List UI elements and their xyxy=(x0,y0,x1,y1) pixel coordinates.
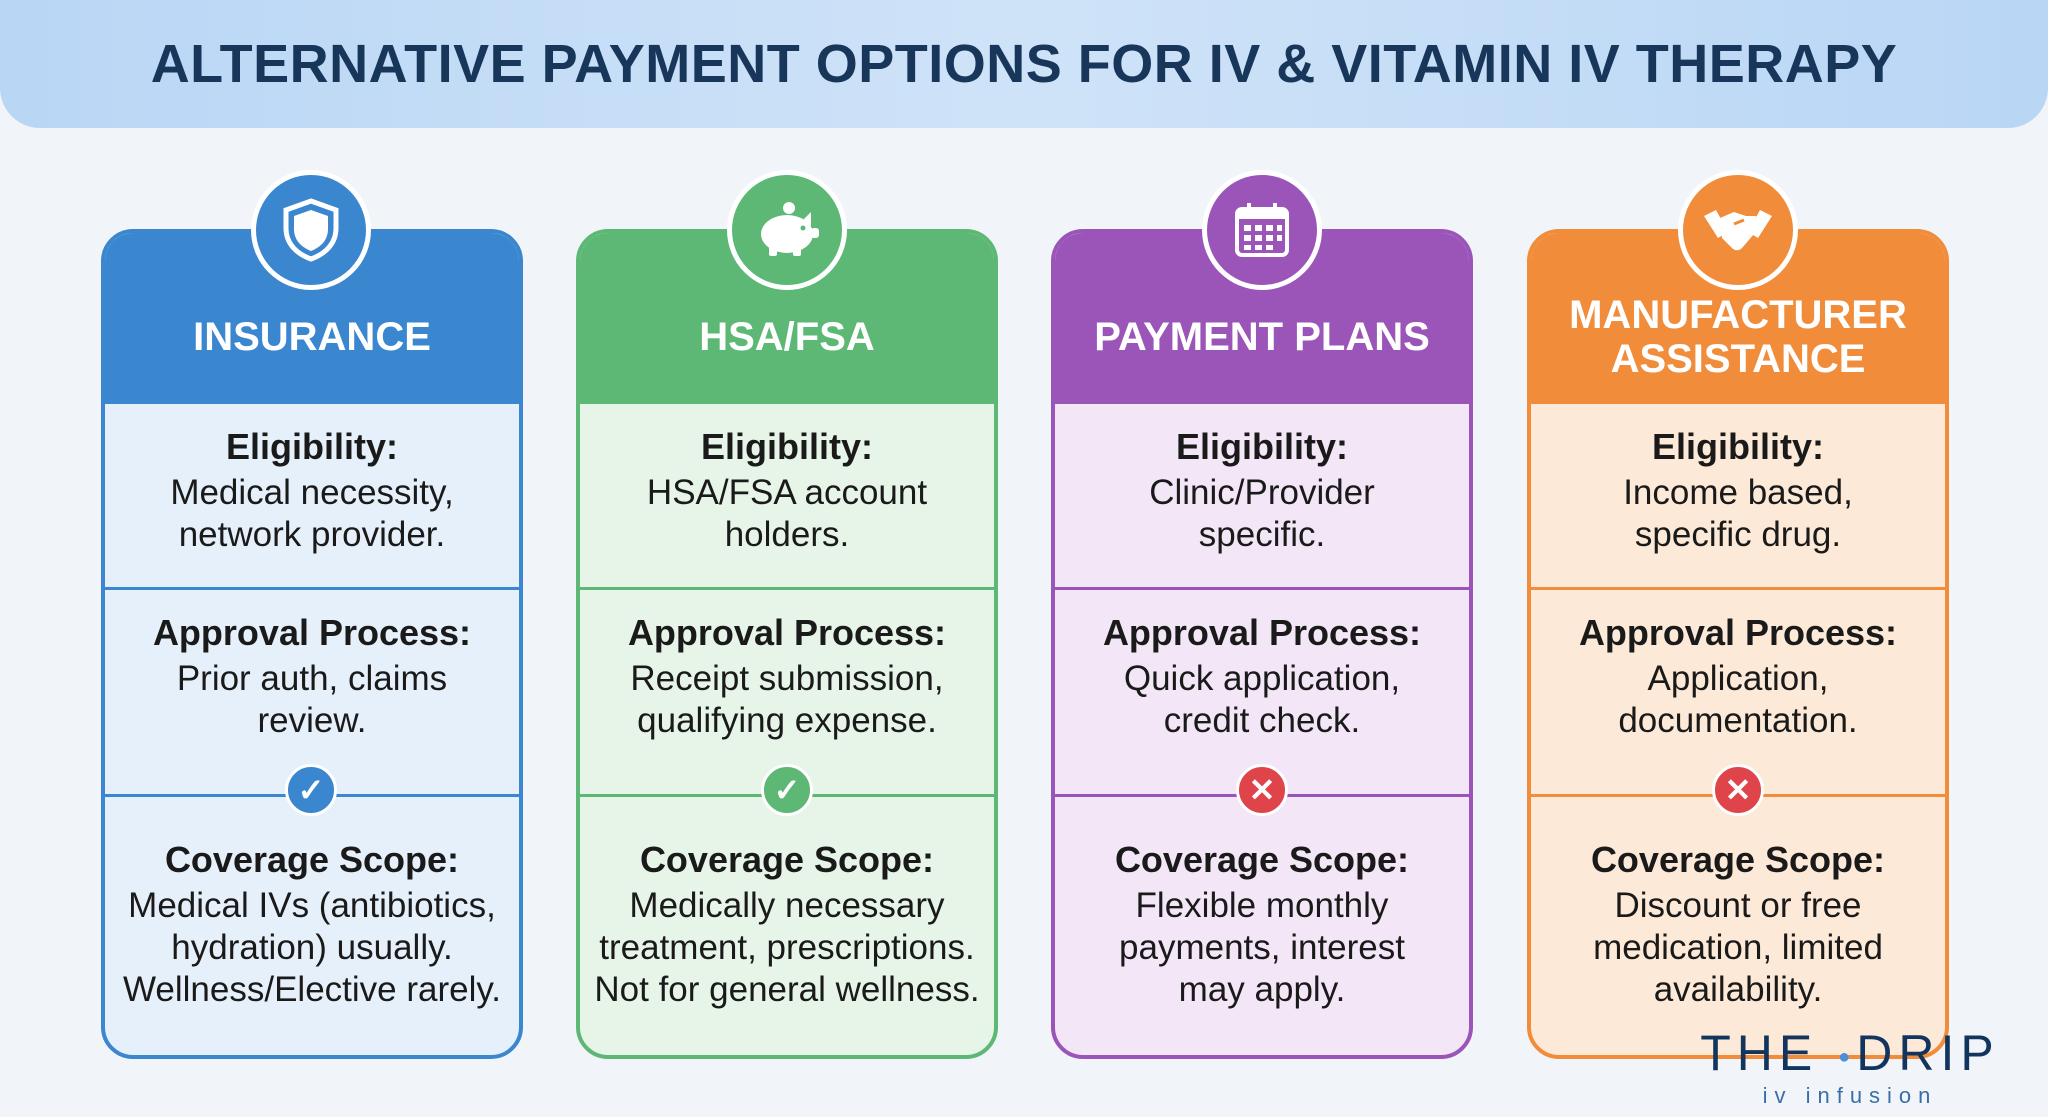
row: coverage: Coverage Scope: xyxy=(1591,839,1885,880)
icon: check insurance xyxy=(285,764,337,816)
row: approval: Quick application, xyxy=(1124,659,1400,698)
row: eligibility: Eligibility: xyxy=(226,426,398,466)
logo xyxy=(1700,1025,2000,1108)
row: coverage xyxy=(580,794,994,1063)
row: eligibility: Eligibility: xyxy=(1652,426,1824,466)
row: approval xyxy=(580,587,994,794)
row: eligibility: specific. xyxy=(1199,514,1325,554)
logo: THE ●DRIP xyxy=(1700,1025,2000,1081)
panel: manufacturer assistance xyxy=(1527,229,1949,1059)
icon: x manufacturer: ✕ xyxy=(1725,772,1751,808)
row: approval: credit check. xyxy=(1164,701,1360,740)
row: approval: Approval Process: xyxy=(628,612,946,653)
row: approval: Application, xyxy=(1648,659,1828,698)
title xyxy=(0,0,2048,128)
row: coverage: treatment, prescriptions. xyxy=(599,928,975,967)
icon: handshake xyxy=(1678,170,1798,290)
row: coverage: Medically necessary xyxy=(629,886,945,925)
row: coverage: hydration) usually. xyxy=(171,928,453,967)
header: payment plans: PAYMENT PLANS xyxy=(1094,315,1430,359)
row: eligibility xyxy=(105,401,519,587)
row: eligibility xyxy=(1531,401,1945,587)
title: ALTERNATIVE PAYMENT OPTIONS FOR IV & VITAMIN IV THERAPY xyxy=(151,34,1897,94)
icon: x payment plans xyxy=(1236,764,1288,816)
row: coverage: Coverage Scope: xyxy=(640,839,934,880)
row: coverage: Medical IVs (antibiotics, xyxy=(128,886,496,925)
row: coverage: Discount or free xyxy=(1614,886,1862,925)
row: approval: documentation. xyxy=(1618,701,1858,740)
row: approval: qualifying expense. xyxy=(637,701,937,740)
row: eligibility: HSA/FSA account xyxy=(647,472,927,512)
row: eligibility xyxy=(1055,401,1469,587)
row: coverage: may apply. xyxy=(1179,970,1345,1009)
row: coverage: Flexible monthly xyxy=(1136,886,1388,925)
row: coverage: medication, limited xyxy=(1593,928,1883,967)
row: eligibility: Clinic/Provider xyxy=(1149,472,1375,512)
icon: check hsa xyxy=(761,764,813,816)
row: eligibility: Medical necessity, xyxy=(170,472,454,512)
row: approval: Approval Process: xyxy=(153,612,471,653)
header: manufacturer xyxy=(1531,233,1945,401)
row: approval xyxy=(105,587,519,794)
icon: piggy bank xyxy=(727,170,847,290)
row: eligibility: Eligibility: xyxy=(1176,426,1348,466)
icon: shield xyxy=(251,170,371,290)
header: manufacturer: MANUFACTURER xyxy=(1569,293,1907,337)
row: coverage xyxy=(1055,794,1469,1063)
logo: iv infusion xyxy=(1763,1083,1937,1108)
panel: payment plans xyxy=(1051,229,1473,1059)
row: approval: review. xyxy=(258,701,366,740)
header: insurance: INSURANCE xyxy=(193,315,431,359)
row: eligibility: Eligibility: xyxy=(701,426,873,466)
icon: calendar xyxy=(1202,170,1322,290)
header: payment plans xyxy=(1055,233,1469,401)
row: coverage: Wellness/Elective rarely. xyxy=(123,970,501,1009)
row: eligibility: network provider. xyxy=(179,514,445,554)
panel: insurance xyxy=(101,229,523,1059)
row: eligibility: specific drug. xyxy=(1635,514,1841,554)
row: coverage xyxy=(105,794,519,1063)
row: approval xyxy=(1055,587,1469,794)
row: coverage: Coverage Scope: xyxy=(1115,839,1409,880)
row: coverage xyxy=(1531,794,1945,1063)
header: manufacturer: ASSISTANCE xyxy=(1611,337,1865,381)
row: coverage: payments, interest xyxy=(1119,928,1405,967)
header: hsa xyxy=(580,233,994,401)
row: eligibility xyxy=(580,401,994,587)
row: approval xyxy=(1531,587,1945,794)
row: approval: Approval Process: xyxy=(1103,612,1421,653)
panel: hsa/fsa xyxy=(576,229,998,1059)
row: approval: Prior auth, claims xyxy=(177,659,447,698)
icon: x manufacturer xyxy=(1712,764,1764,816)
icon: x payment plans: ✕ xyxy=(1249,772,1275,808)
row: approval: Approval Process: xyxy=(1579,612,1897,653)
icon: check insurance: ✓ xyxy=(298,772,324,808)
header: hsa: HSA/FSA xyxy=(699,315,875,359)
row: coverage: Not for general wellness. xyxy=(594,970,980,1009)
row: approval: Receipt submission, xyxy=(630,659,944,698)
row: coverage: availability. xyxy=(1654,970,1822,1009)
header: insurance xyxy=(105,233,519,401)
icon: check hsa: ✓ xyxy=(774,772,800,808)
row: eligibility: holders. xyxy=(725,514,849,554)
row: eligibility: Income based, xyxy=(1623,472,1853,512)
row: coverage: Coverage Scope: xyxy=(165,839,459,880)
